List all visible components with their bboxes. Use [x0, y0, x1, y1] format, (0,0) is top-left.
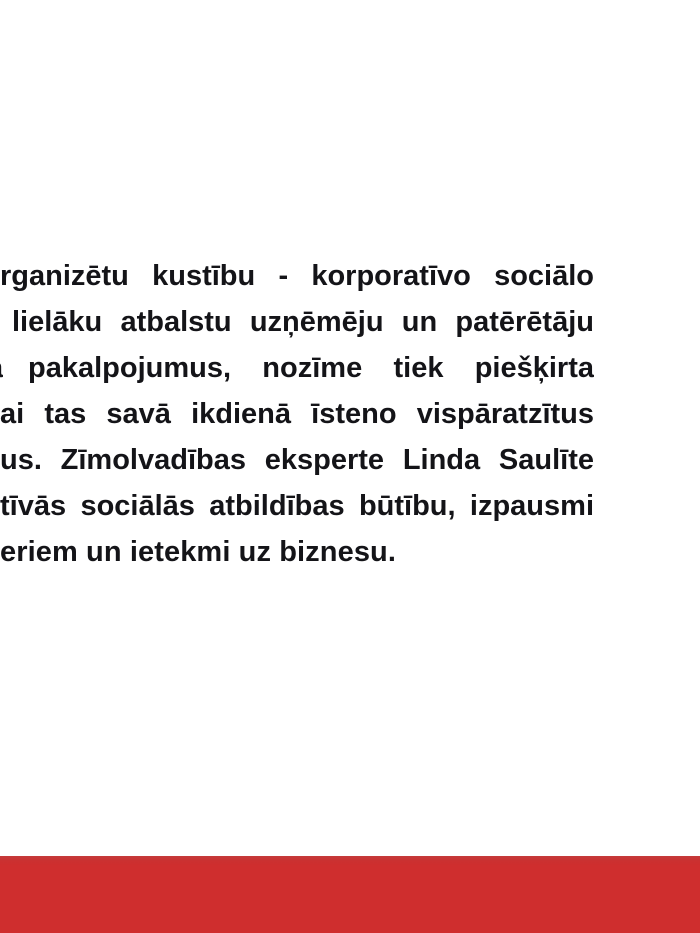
- text block: intro paragraph: tīvās sociālās atbildības būtību, izpausmi: [0, 490, 594, 522]
- text block: intro paragraph: [0, 260, 594, 568]
- text block: intro paragraph: ai tas savā ikdienā īsteno vispāratzītus: [0, 398, 594, 430]
- text block: intro paragraph: lielāku atbalstu uzņēmēju un patērētāju: [12, 306, 594, 338]
- text block: intro paragraph: eriem un ietekmi uz biznesu.: [0, 536, 396, 568]
- text block: intro paragraph: pakalpojumus, nozīme tiek piešķirta: [28, 352, 594, 384]
- text block: intro paragraph: rganizētu kustību - korporatīvo sociālo: [0, 260, 594, 292]
- footer: red band: [0, 856, 700, 933]
- text block: intro paragraph: us. Zīmolvadības eksperte Linda Saulīte: [0, 444, 594, 476]
